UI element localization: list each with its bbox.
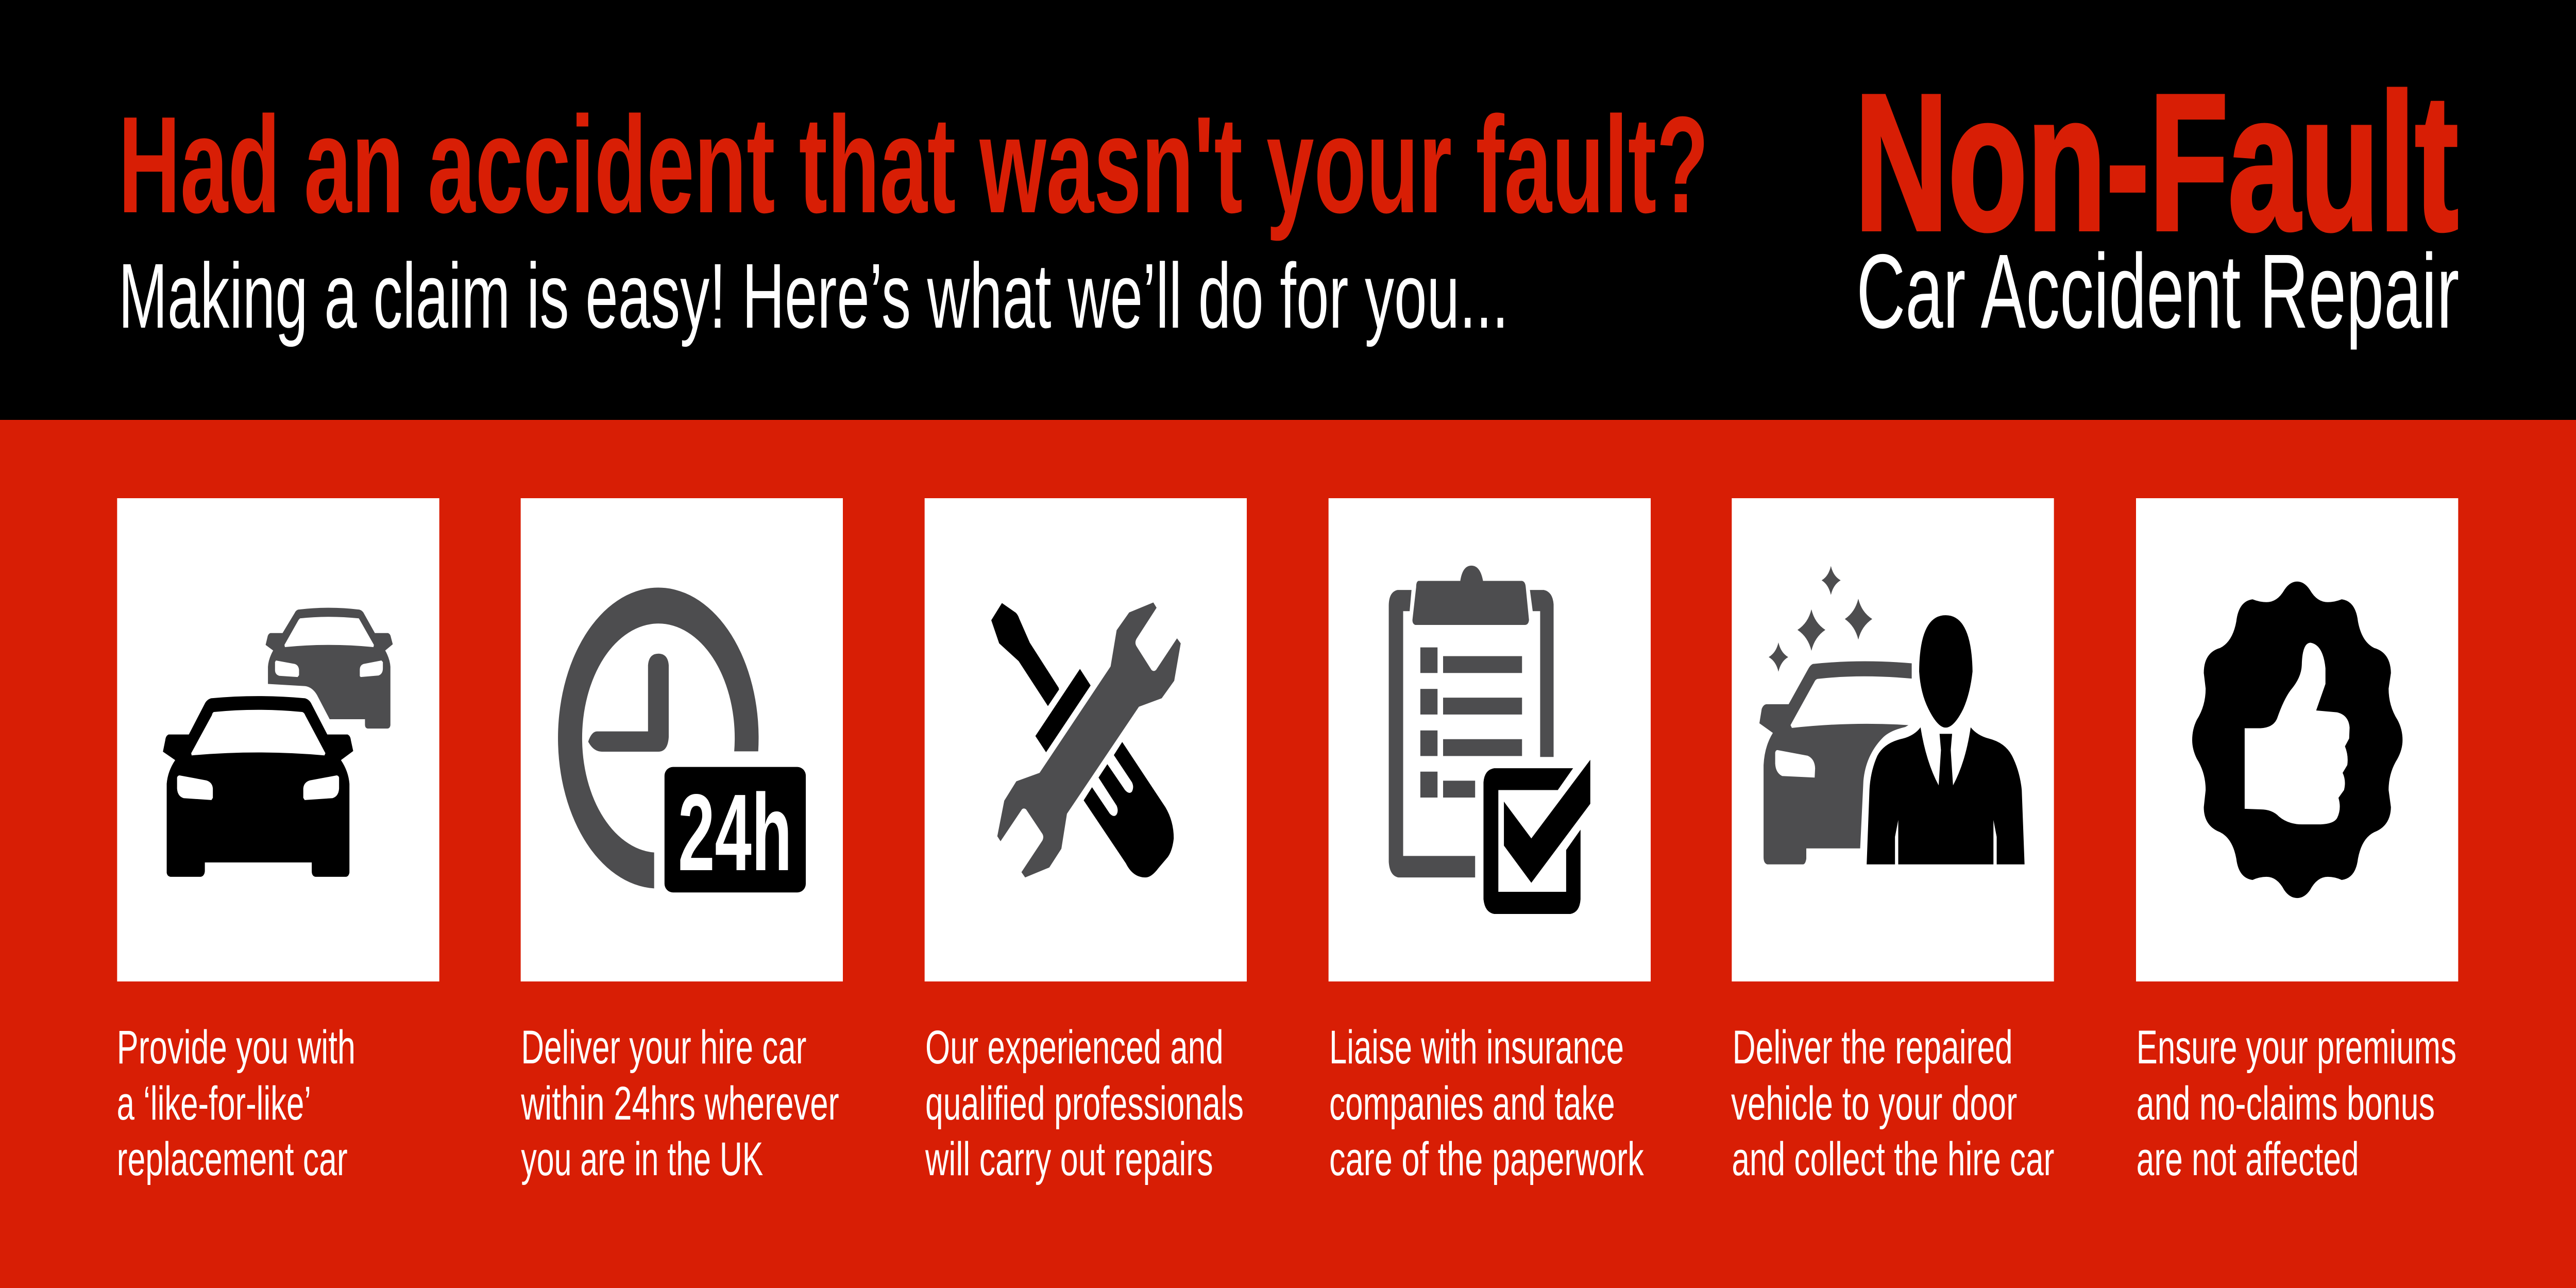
- panel: repairs: [925, 498, 1247, 1185]
- caption: vehicle return: [1731, 1020, 2054, 1185]
- panel: replacement car: [117, 498, 439, 1185]
- caption: replacement car: a ‘like-for-like’: [117, 1076, 311, 1130]
- caption: vehicle return: vehicle to your door: [1731, 1076, 2017, 1130]
- caption: premiums unaffected: [2137, 1020, 2456, 1185]
- subtitle: Making a claim is easy! Here’s what we’ll do for you...: [118, 245, 1509, 348]
- caption: insurance paperwork: companies and take: [1329, 1076, 1615, 1130]
- icon: wrench and screwdriver: [991, 602, 1181, 877]
- logo: Non-Fault Car Accident Repair: Car Accident Repair: [1856, 232, 2459, 350]
- caption: insurance paperwork: [1329, 1020, 1644, 1185]
- icon: sparkling car and suited man: [1759, 566, 2025, 865]
- icon: thumbs up badge: [2192, 582, 2402, 898]
- caption: insurance paperwork: Liaise with insurance: [1329, 1020, 1624, 1074]
- caption: replacement car: Provide you with: [117, 1020, 355, 1074]
- panel: insurance paperwork: [1329, 498, 1651, 1185]
- icon: clock with 24h badge: [558, 588, 806, 894]
- title: Had an accident that wasn't your fault?: [118, 89, 1709, 242]
- caption: 24 hour delivery: Deliver your hire car: [521, 1020, 806, 1074]
- icon: clipboard with checkbox: [1389, 566, 1590, 914]
- caption: repairs: qualified professionals: [925, 1076, 1244, 1130]
- caption: replacement car: [117, 1020, 355, 1185]
- panel: premiums unaffected: [2136, 498, 2458, 1185]
- caption: vehicle return: and collect the hire car: [1732, 1132, 2054, 1185]
- caption: premiums unaffected: and no-claims bonus: [2137, 1076, 2435, 1130]
- caption: repairs: will carry out repairs: [925, 1132, 1213, 1185]
- caption: premiums unaffected: are not affected: [2137, 1132, 2359, 1185]
- logo: Non-Fault Car Accident Repair: Non-Fault: [1855, 54, 2458, 270]
- caption: 24 hour delivery: within 24hrs wherever: [521, 1076, 839, 1130]
- caption: insurance paperwork: care of the paperwork: [1329, 1132, 1644, 1185]
- caption: premiums unaffected: Ensure your premiums: [2137, 1020, 2456, 1074]
- header band: [0, 0, 2576, 420]
- icon: two cars: [163, 608, 393, 877]
- caption: vehicle return: Deliver the repaired: [1733, 1020, 2013, 1074]
- caption: repairs: Our experienced and: [925, 1020, 1224, 1074]
- caption: 24 hour delivery: [521, 1020, 839, 1185]
- icon: clock with 24h badge: 24h: [678, 772, 792, 894]
- caption: repairs: [925, 1020, 1244, 1185]
- caption: 24 hour delivery: you are in the UK: [521, 1132, 763, 1185]
- panel: vehicle return: [1731, 498, 2054, 1185]
- panel: 24 hour delivery: [521, 498, 843, 1185]
- caption: replacement car: replacement car: [117, 1132, 348, 1185]
